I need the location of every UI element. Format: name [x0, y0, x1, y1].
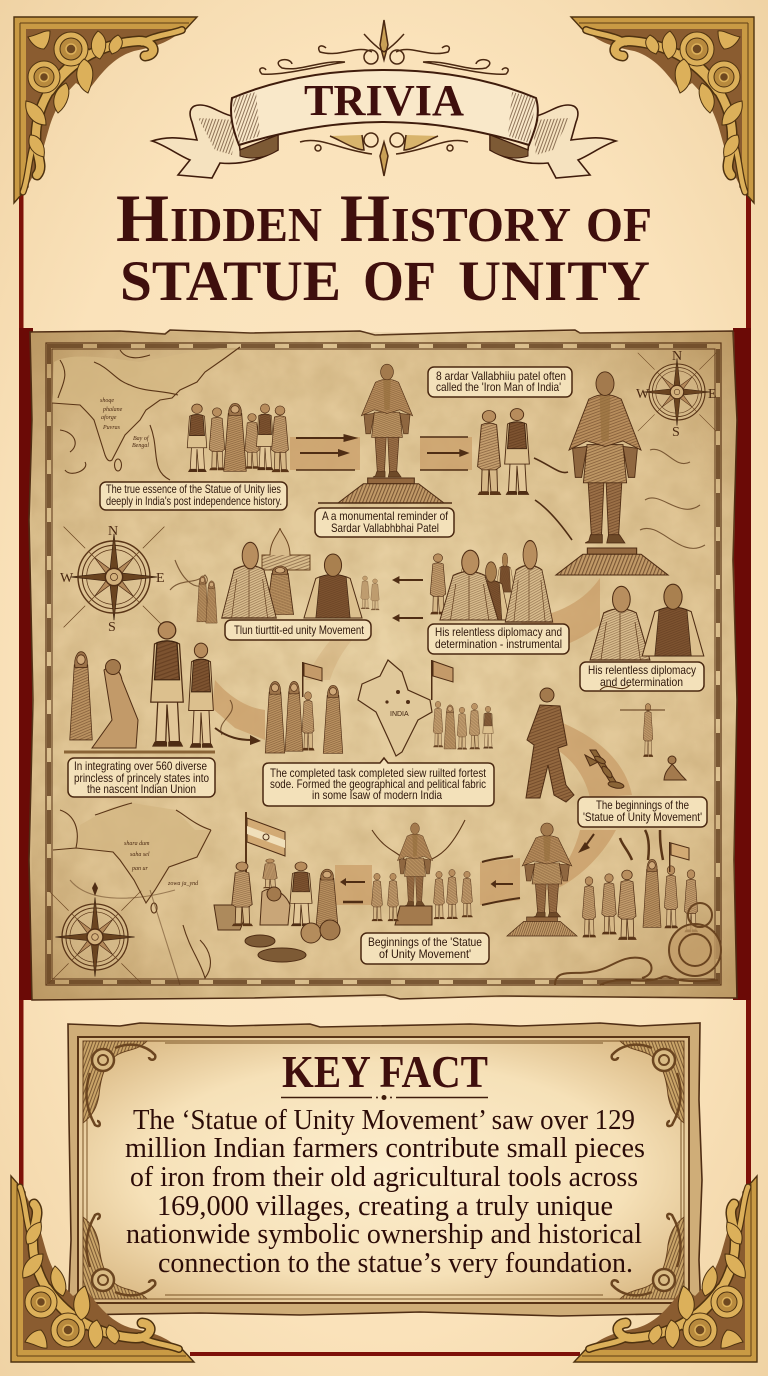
- small couple left: [197, 576, 217, 623]
- key fact text: million Indian farmers contribute small pieces: [125, 1133, 645, 1164]
- compass bottom left: [49, 882, 141, 983]
- main title: [116, 180, 652, 313]
- two leaders clapping: [590, 584, 704, 660]
- corner ornament: bottom right: [574, 1176, 757, 1362]
- key fact text: The ‘Statue of Unity Movement’ saw over 129: [133, 1105, 635, 1136]
- ribbon band: [231, 70, 538, 145]
- ornament above ribbon: [260, 20, 508, 74]
- callout: diplomacy instrumental: determination - instrumental: [435, 637, 562, 651]
- compass top right: W: [636, 387, 650, 402]
- title line 1: IDDEN: [170, 197, 322, 252]
- key fact text: 169,000 villages, creating a truly unique: [157, 1191, 613, 1222]
- callout: true essence: deeply in India's post independence history.: [106, 494, 282, 508]
- compass middle left: W: [60, 571, 74, 586]
- title line 1: H: [340, 180, 390, 256]
- compass top right: N: [672, 349, 682, 364]
- two men shaking hands: [478, 409, 529, 495]
- diplomacy group: [430, 541, 553, 622]
- callout: completed task: The completed task completed siew ruilted fortest: [270, 766, 487, 780]
- callout: diplomacy instrumental: His relentless diplomacy and: [435, 625, 562, 639]
- old map of India top left: Bay of: [133, 435, 150, 442]
- statue lower right: [507, 823, 577, 936]
- large statue on pedestal: [534, 372, 668, 575]
- key fact text: [125, 1105, 645, 1279]
- map of India bottom left: [53, 803, 211, 985]
- callout: beginnings statue: Beginnings of the 'Statue: [368, 935, 482, 949]
- seated farmers with iron: [214, 859, 340, 962]
- callout: diplomacy and determination: and determination: [600, 675, 683, 689]
- crowd with flag: [582, 830, 698, 940]
- callout: monumental reminder: [315, 508, 454, 537]
- map of India bottom left: pan ur: [131, 866, 148, 872]
- callout: completed task: [263, 758, 494, 806]
- compass top right: [636, 349, 717, 440]
- title line 2: UNITY: [458, 250, 650, 313]
- map of India bottom left: saha sel: [130, 852, 150, 858]
- leaf branch on band: [585, 750, 624, 789]
- old map of India top left: aforge: [101, 414, 117, 421]
- callout: integrating 560 states: In integrating over 560 diverse: [74, 759, 207, 773]
- callout: diplomacy and determination: [580, 662, 704, 691]
- callout: monumental reminder: Sardar Vallabhbhai Patel: [331, 521, 439, 535]
- callout: integrating 560 states: the nascent Indian Union: [87, 782, 196, 796]
- title line 1: [116, 180, 652, 256]
- panel corner scrolls: [83, 1041, 684, 1299]
- walking man: [526, 688, 574, 802]
- callout: integrating 560 states: [68, 758, 215, 797]
- India map with flag: [358, 660, 453, 756]
- corner ornament: top right: [571, 17, 754, 203]
- callout: diplomacy instrumental: [428, 624, 569, 654]
- compass middle left: N: [108, 524, 118, 539]
- group of people top left: [187, 403, 289, 472]
- integrating states group: [64, 622, 215, 752]
- title line 1: OF: [586, 197, 652, 252]
- key fact text: connection to the statue’s very foundation.: [158, 1248, 633, 1279]
- arrow to handshake: [420, 437, 470, 470]
- women with flag: [265, 662, 343, 753]
- title line 2: [120, 250, 650, 313]
- title line 1: ISTORY: [391, 197, 571, 252]
- title line 1: H: [116, 180, 169, 256]
- ornament below ribbon: [300, 133, 468, 176]
- callout: true essence: The true essence of the Statue of Unity lies: [106, 482, 281, 496]
- callout: diplomacy and determination: His relentless diplomacy: [588, 663, 696, 677]
- callout: iron man: [428, 367, 572, 397]
- callout: true essence: [100, 482, 287, 510]
- callout: beginnings movement: The beginnings of the: [596, 798, 689, 812]
- key fact text: of iron from their old agricultural tools across: [130, 1162, 638, 1193]
- compass top right: E: [708, 387, 717, 402]
- callout: integrating 560 states: princless of princely states into: [74, 771, 209, 785]
- arrows to statue: [296, 434, 358, 470]
- flag on pole: [245, 812, 285, 902]
- callout: beginnings movement: 'Statue of Unity Movement': [583, 810, 702, 824]
- old map of India top left: Bengal: [132, 443, 149, 449]
- corner ornament: top left: [14, 17, 197, 203]
- small figures right: [600, 685, 686, 780]
- India map with flag: INDIA: [390, 711, 409, 718]
- arrow to women: [215, 728, 261, 745]
- callout: beginnings movement: [578, 797, 707, 827]
- title line 2: OF: [363, 250, 436, 313]
- compass middle left: S: [108, 620, 116, 635]
- compass middle left: E: [156, 571, 165, 586]
- panel: illustrated history map: [29, 330, 737, 1000]
- heading divider: [281, 1095, 488, 1100]
- trivia ribbon banner: [152, 20, 616, 178]
- arrow down band: [578, 834, 594, 853]
- corner ornament: bottom left: [11, 1176, 194, 1362]
- map of India bottom left: shara dum: [124, 841, 150, 847]
- callout: iron man: 8 ardar Vallabhiiu patel often: [436, 369, 566, 383]
- callout: beginnings statue: of Unity Movement': [379, 947, 471, 961]
- key fact heading: KEY FACT: [282, 1046, 488, 1097]
- compass top right: S: [672, 425, 680, 440]
- panel: key fact: [68, 1023, 702, 1316]
- callout: unity movement: Tlun tiurttit-ed unity Movement: [234, 623, 365, 637]
- dome building: [262, 528, 310, 570]
- arrows back to group: [392, 576, 423, 622]
- ribbon tails: [152, 105, 278, 178]
- crowd beside map: [433, 701, 493, 749]
- faint landscape sketches: [170, 449, 705, 735]
- map of India bottom left: zowa ja_ynd: [167, 881, 199, 887]
- key fact text: nationwide symbolic ownership and historical: [126, 1219, 642, 1250]
- old map of India top left: [52, 347, 240, 480]
- compass middle left: [60, 524, 165, 635]
- old map of India top left: Puvras: [102, 425, 121, 431]
- old map of India top left: shoqe: [100, 398, 114, 404]
- folded hands group: [222, 542, 380, 618]
- callout: unity movement: [225, 620, 371, 640]
- arrows left to farmers: [340, 878, 365, 902]
- old map of India top left: phalane: [102, 407, 123, 413]
- statue with crowd: [372, 820, 473, 925]
- callout: completed task: in some Isaw of modern India: [312, 788, 442, 802]
- statue one on pedestal: [318, 364, 452, 503]
- flow bands: [212, 437, 632, 905]
- callout: iron man: called the 'Iron Man of India': [436, 380, 561, 394]
- trivia label: TRIVIA: [304, 76, 464, 125]
- callout: completed task: sode. Formed the geographical and pelitical fabric: [270, 777, 486, 791]
- callout: monumental reminder: A a monumental reminder of: [322, 509, 449, 523]
- scroll ornament bottom right: [555, 903, 721, 985]
- title line 2: STATUE: [120, 250, 341, 313]
- callout: beginnings statue: [361, 933, 489, 964]
- arrow between statues: [482, 856, 520, 905]
